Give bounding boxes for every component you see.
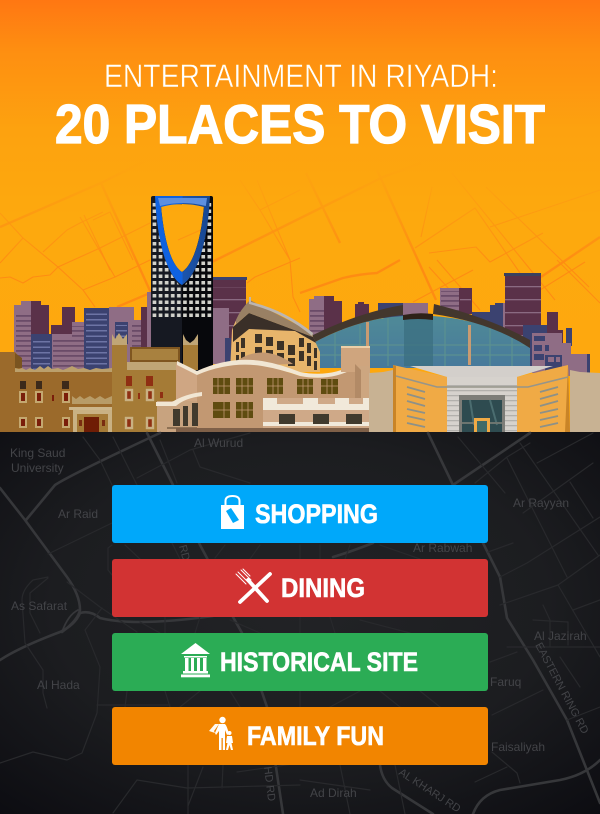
arena dome bbox=[313, 304, 530, 368]
map place labels: King Saud bbox=[10, 446, 65, 460]
orange sky background bbox=[0, 0, 600, 432]
label: historical site: HISTORICAL SITE bbox=[220, 647, 418, 677]
orange street map bbox=[0, 157, 600, 312]
map place labels: Ar Raid bbox=[58, 507, 98, 521]
map place labels: Al Wurud bbox=[194, 436, 243, 450]
skyline illustration bbox=[0, 196, 600, 432]
label: family fun: FAMILY FUN bbox=[247, 721, 384, 751]
dark street map roads bbox=[0, 433, 600, 814]
button: family fun bbox=[112, 707, 488, 765]
map place labels: Al Jazirah bbox=[534, 629, 587, 643]
background buildings behind dome bbox=[309, 273, 590, 376]
map place labels: HD RD bbox=[261, 766, 277, 802]
shopping centre with orange panels bbox=[369, 365, 600, 432]
background buildings right of tower bbox=[213, 277, 247, 364]
map place labels: University bbox=[11, 461, 64, 475]
mud-brick palace bbox=[0, 333, 198, 432]
map place labels: Faruq bbox=[490, 675, 521, 689]
map place labels bbox=[10, 436, 591, 814]
icon: fork and knife bbox=[236, 569, 270, 602]
icon: parent and child bbox=[209, 717, 233, 750]
map place labels: Ar Rayyan bbox=[513, 496, 569, 510]
map place labels: EASTERN RING RD bbox=[532, 641, 591, 736]
button: shopping bbox=[112, 485, 488, 543]
button: dining bbox=[112, 559, 488, 617]
map place labels: As Safarat bbox=[11, 599, 68, 613]
Kingdom Centre tower bbox=[151, 196, 213, 380]
background buildings left bbox=[14, 292, 152, 375]
title line 1: ENTERTAINMENT IN RIYADH: bbox=[104, 58, 498, 94]
map place labels: Faisaliyah bbox=[491, 740, 545, 754]
label: dining: DINING bbox=[281, 573, 365, 603]
map place labels: Al Hada bbox=[37, 678, 80, 692]
label: shopping: SHOPPING bbox=[255, 499, 378, 529]
title bbox=[55, 58, 545, 155]
map place labels: AL KHARJ RD bbox=[396, 766, 463, 814]
icon: shopping bag bbox=[221, 496, 244, 529]
icon: museum building bbox=[181, 643, 210, 677]
beige mall building bbox=[156, 346, 370, 432]
dark street map background bbox=[0, 432, 600, 814]
curved-roof hotel building bbox=[230, 297, 320, 372]
map place labels: RD bbox=[176, 544, 192, 562]
button: historical site bbox=[112, 633, 488, 691]
title line 2: 20 PLACES TO VISIT bbox=[55, 93, 545, 155]
map place labels: Ar Rabwah bbox=[413, 541, 472, 555]
map place labels: Ad Dirah bbox=[310, 786, 357, 800]
